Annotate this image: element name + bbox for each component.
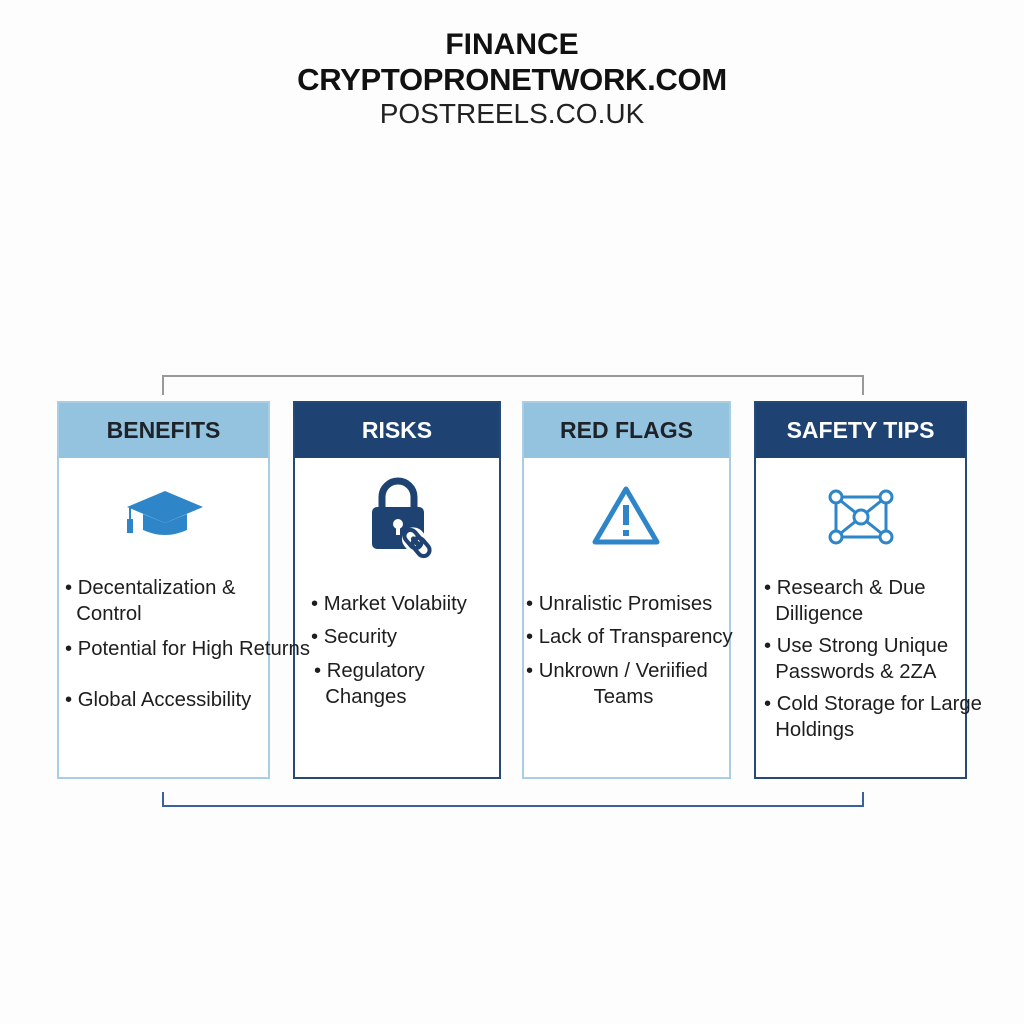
bullets: safety tips: Dilligence	[775, 603, 863, 625]
header: risks	[295, 403, 499, 458]
panel: benefits: • Potential for High Returns	[65, 638, 310, 660]
icon: network	[828, 490, 894, 544]
header: red flags	[524, 403, 729, 458]
subtitle: site: CRYPTOPRONETWORK.COM	[297, 62, 727, 97]
panel: risks: • Security	[311, 626, 397, 648]
header: benefits: BENEFITS	[107, 417, 220, 443]
panel: safety tips: • Cold Storage for Large	[764, 693, 982, 715]
bullets: benefits: Control	[76, 603, 142, 625]
bullets: safety tips: • Research & Due	[764, 577, 926, 599]
top bracket	[162, 375, 864, 395]
panel: safety tips: • Use Strong Unique	[764, 635, 948, 657]
bullets: safety tips	[764, 577, 926, 625]
bullets: risks: • Market Volabiity	[311, 593, 467, 615]
header: red flags: RED FLAGS	[560, 417, 693, 443]
bullets: red flags: • Unralistic Promises	[526, 593, 712, 615]
panel: benefits	[57, 401, 270, 779]
panel: safety tips: Holdings	[775, 719, 854, 741]
panel: benefits: • Global Accessibility	[65, 689, 251, 711]
panel: red flags: • Unkrown / Veriified	[526, 660, 708, 682]
header: benefits	[59, 403, 268, 458]
icon: warning triangle	[592, 486, 660, 544]
header: safety tips	[756, 403, 965, 458]
icon: lock with chain	[372, 478, 432, 558]
header: risks: RISKS	[362, 417, 432, 443]
bottom bracket	[162, 792, 864, 807]
bullets: benefits: • Decentalization &	[65, 577, 236, 599]
panel: safety tips: Passwords & 2ZA	[775, 661, 936, 683]
icon: graduation cap	[127, 491, 203, 535]
panel: red flags	[522, 401, 731, 779]
bullets: benefits	[65, 577, 236, 625]
panel: safety tips	[754, 401, 967, 779]
panel: red flags: Teams	[594, 686, 653, 708]
panel: risks: Changes	[325, 686, 406, 708]
title: FINANCE	[445, 28, 579, 61]
panel: red flags: • Lack of Transparency	[526, 626, 733, 648]
panel: risks: • Regulatory	[314, 660, 425, 682]
subtitle: site 2: POSTREELS.CO.UK	[380, 98, 644, 129]
panel: risks	[293, 401, 501, 779]
header: safety tips: SAFETY TIPS	[787, 417, 934, 443]
